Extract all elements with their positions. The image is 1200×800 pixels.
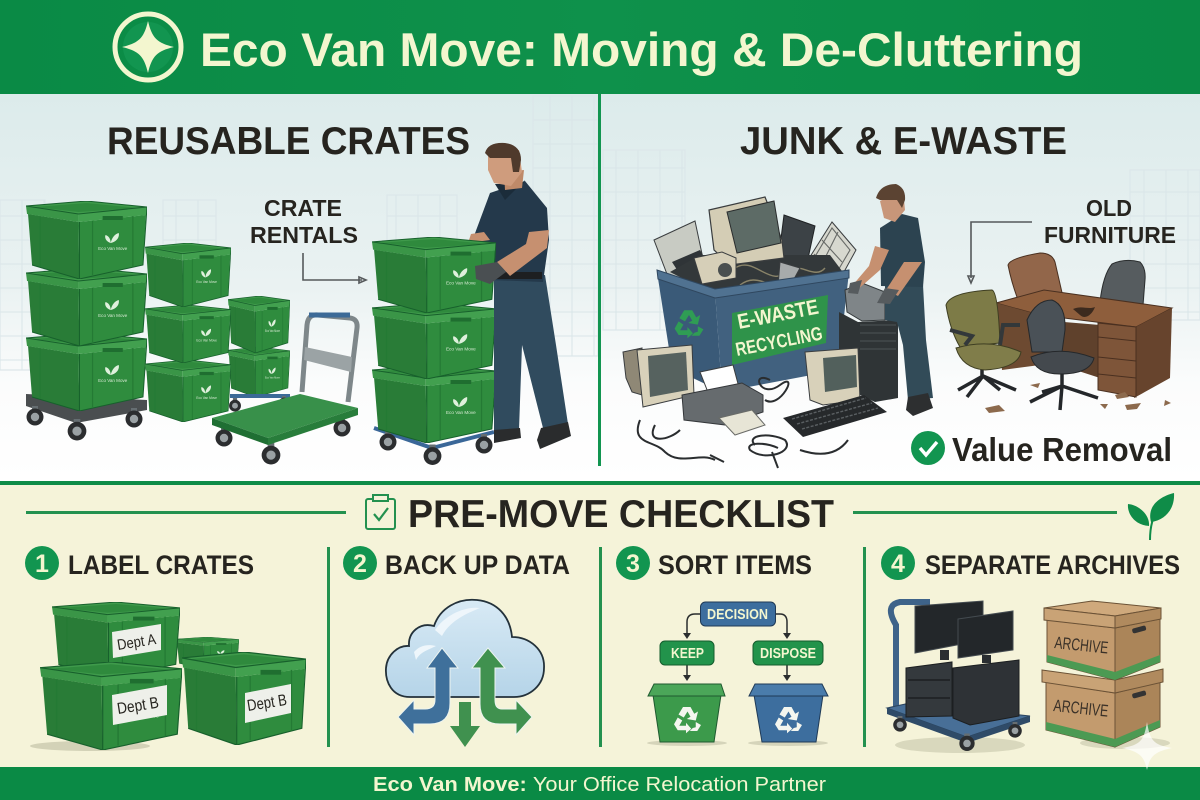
illustration: front crate and glove (372, 237, 506, 313)
divider: between top panels (598, 94, 601, 466)
illustration: keyboard (783, 395, 887, 437)
illustration: tower pc and box (839, 283, 898, 402)
heading: step 3: SORT ITEMS (658, 550, 812, 580)
illustration: labelled crates: Dept B (116, 695, 160, 718)
heading: step 4: 4 (891, 550, 905, 578)
icon: clipboard (366, 495, 395, 529)
label: old furniture: FURNITURE (1044, 222, 1176, 248)
icon: sparkle watermark (1122, 722, 1172, 770)
illustration: middle crate stack (145, 243, 290, 422)
panel: reusable crates (0, 94, 598, 480)
heading: step 2: 2 (353, 550, 367, 578)
panel: footer (0, 767, 1200, 800)
callout: value removal: Value Removal (952, 431, 1172, 468)
panel: header banner (0, 0, 1200, 94)
sub: debris (985, 383, 1171, 413)
label: old furniture: OLD (1086, 195, 1132, 221)
icon: logo (115, 14, 181, 80)
illustration: old monitors and printer (623, 345, 860, 435)
icon: leaf (1128, 493, 1174, 540)
icon: green keep bin (647, 684, 727, 746)
illustration: worker with tower (848, 184, 933, 416)
illustration: labelled crates: Dept A (116, 631, 157, 654)
heading: step 1: LABEL CRATES (68, 550, 254, 580)
illustration: left crate stack on dolly (26, 201, 147, 440)
flowchart: decision: KEEP (671, 646, 704, 662)
heading: step 3: 3 (626, 550, 640, 578)
arrow: old furniture (968, 222, 1032, 283)
illustration: labelled crates: Dept B (246, 692, 288, 715)
footer text: Eco Van Move: Your Office Relocation Partner (373, 774, 826, 796)
label: crate rentals: RENTALS (250, 222, 358, 248)
heading: step 3 (616, 546, 812, 580)
illustration: right crate stack on dolly (372, 303, 496, 465)
illustration: archive boxes: ARCHIVE (1054, 633, 1109, 658)
step 1: label crates (25, 546, 306, 751)
flowchart: decision (660, 602, 823, 681)
heading: reusable crates: REUSABLE CRATES (107, 120, 470, 163)
illustration: labelled crates (30, 602, 306, 751)
icon: blue dispose bin (748, 684, 828, 746)
label: e-waste recycling sign: E-WASTE (736, 296, 820, 334)
sub: olive chair (946, 290, 1021, 397)
illustration: old furniture (946, 253, 1172, 413)
label: e-waste recycling sign (732, 295, 828, 365)
heading: junk and e-waste: JUNK & E-WASTE (740, 120, 1067, 163)
heading: step 1: 1 (35, 550, 49, 578)
panel: pre-move checklist (0, 481, 1200, 767)
heading: step 2 (343, 546, 570, 580)
illustration: blue recycling bin (657, 270, 849, 392)
step 2: back up data (343, 546, 570, 747)
sub: dark chair (1027, 300, 1098, 410)
flowchart: decision: DISPOSE (760, 646, 816, 662)
heading: pre-move checklist: PRE-MOVE CHECKLIST (408, 493, 834, 536)
illustration: archive boxes (1042, 601, 1170, 749)
illustration: archive boxes: ARCHIVE (1053, 696, 1109, 721)
flowchart: decision: DECISION (707, 607, 768, 623)
heading: step 1 (25, 546, 254, 580)
illustration: flat cart (212, 315, 358, 464)
illustration: mover with crate (468, 143, 571, 449)
arrow: crate rentals (303, 253, 366, 283)
step 4: separate archives (881, 546, 1180, 753)
illustration: equipment on cart (887, 601, 1030, 753)
label: old furniture (1044, 195, 1176, 248)
illustration: cables (638, 378, 848, 468)
label: e-waste recycling sign: RECYCLING (734, 324, 824, 361)
icon: cloud with arrows (386, 600, 544, 747)
title: Eco Van Move: Moving & De-Cluttering (200, 23, 1083, 76)
heading: step 2: BACK UP DATA (385, 550, 570, 580)
icon: green recycle mark (675, 310, 703, 338)
panel: junk and e-waste (601, 94, 1200, 480)
label: crate rentals: CRATE (264, 195, 342, 221)
step 3: sort items (616, 546, 828, 746)
illustration: e-waste pile in bin (654, 197, 856, 295)
label: crate rentals (250, 195, 358, 248)
